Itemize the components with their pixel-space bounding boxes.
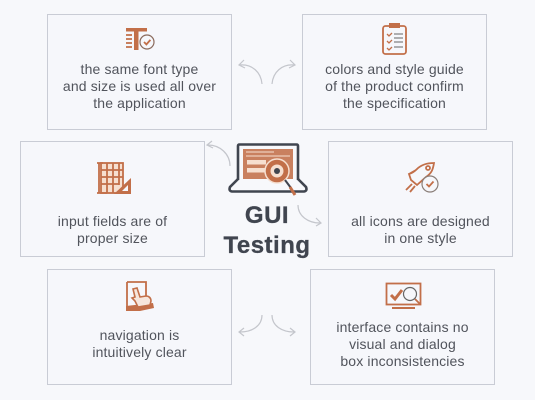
panel: icons style	[328, 141, 513, 257]
text	[336, 319, 469, 369]
arrow: to font panel	[238, 60, 262, 84]
panel: colors and style guide	[302, 14, 487, 130]
panel: input fields	[20, 141, 205, 257]
text: input fields are of	[58, 213, 167, 229]
panel: same font	[47, 14, 232, 130]
arrow: to icons panel	[297, 205, 322, 226]
title: GUI	[245, 202, 289, 229]
arrow: to colors panel	[272, 60, 296, 84]
text: intuitively clear	[92, 344, 187, 360]
text: of the product confirm	[325, 78, 464, 94]
arrow: to navigation panel	[238, 315, 263, 336]
icon: laptop with gear and magnifier	[228, 143, 308, 196]
text	[92, 327, 187, 360]
panel: navigation	[47, 269, 232, 385]
text: navigation is	[100, 327, 179, 343]
text: in one style	[384, 230, 457, 246]
text: proper size	[77, 230, 148, 246]
icon: rocket with check	[405, 162, 439, 193]
text	[63, 61, 216, 111]
text: the same font type	[81, 61, 198, 77]
text: colors and style guide	[325, 61, 464, 77]
text	[325, 61, 464, 111]
text: the specification	[343, 95, 446, 111]
text: box inconsistencies	[340, 353, 465, 369]
text: and size is used all over	[63, 78, 216, 94]
title	[223, 202, 311, 259]
text: interface contains no	[336, 319, 469, 335]
arrow: to interface panel	[271, 315, 296, 336]
icon: monitor with magnifier	[386, 282, 422, 309]
icon: font check	[126, 28, 155, 50]
arrow: to input fields panel	[206, 140, 230, 166]
text: the application	[93, 95, 186, 111]
icon: clipboard checklist	[382, 23, 407, 55]
icon: hand on tablet	[126, 281, 154, 311]
text: visual and dialog	[349, 336, 456, 352]
title: Testing	[223, 232, 311, 259]
panel: interface consistency	[310, 269, 495, 385]
icon: grid and set square	[97, 162, 131, 194]
text: all icons are designed	[351, 213, 490, 229]
text	[351, 213, 490, 246]
text	[58, 213, 168, 246]
